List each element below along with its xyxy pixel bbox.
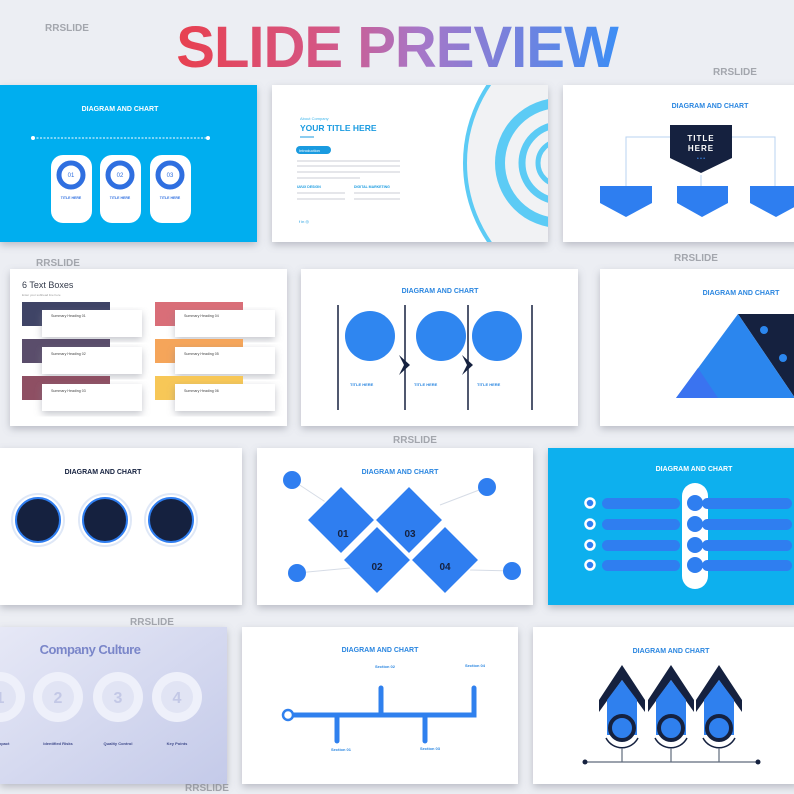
slide 2: Introduction <box>299 148 320 153</box>
slide 8: 04 <box>439 562 451 573</box>
title: SLIDE PREVIEW <box>176 15 619 80</box>
slide 1 <box>0 85 257 242</box>
slide 10 <box>0 627 227 784</box>
slide 2 <box>268 84 552 248</box>
slide 4: Summary Heading 03 <box>51 389 86 393</box>
slide 9 <box>548 448 794 605</box>
slide 2: f in ◎ <box>299 219 309 224</box>
slide 5: DIAGRAM AND CHART <box>402 288 479 295</box>
slide 6: DIAGRAM AND CHART <box>703 290 780 297</box>
slide 4: Summary Heading 06 <box>184 389 219 393</box>
slide 5: TITLE HERE <box>477 382 501 387</box>
watermarks: RRSLIDE <box>45 23 89 34</box>
slide 4: 6 Text Boxes <box>22 280 74 290</box>
slide 3: DIAGRAM AND CHART <box>672 103 749 110</box>
slide 6 <box>600 269 794 426</box>
watermarks: RRSLIDE <box>674 253 718 264</box>
slide 10: 3 <box>114 690 123 707</box>
slide 10: Quality Control <box>104 741 132 746</box>
slide 4: Summary Heading 05 <box>184 352 219 356</box>
slide 2: About Company <box>300 116 329 121</box>
slide 11: Section 01 <box>331 747 352 752</box>
slide 2: YOUR TITLE HERE <box>300 123 377 133</box>
slide 10: Company Culture <box>40 642 141 657</box>
slide 11: Section 02 <box>375 664 396 669</box>
slide 10: Key Points <box>167 741 188 746</box>
slide 1: TITLE HERE <box>160 196 181 200</box>
slide 10: 4 <box>173 690 182 707</box>
slide 5: TITLE HERE <box>350 382 374 387</box>
slide 8: DIAGRAM AND CHART <box>362 469 439 476</box>
slide 11: Section 03 <box>420 746 441 751</box>
slide 11 <box>242 627 518 784</box>
slide 3: TITLE <box>687 134 715 143</box>
slide 2: UI/UX DESIGN <box>297 185 321 189</box>
slide 5: TITLE HERE <box>414 382 438 387</box>
slide 7 <box>0 448 242 605</box>
watermarks: RRSLIDE <box>36 258 80 269</box>
slide 3 <box>563 85 794 242</box>
slide 8 <box>257 448 533 605</box>
slide 10: 2 <box>54 690 63 707</box>
slide 8: 01 <box>337 529 349 540</box>
slide 5 <box>301 269 578 426</box>
slide 3: HERE <box>688 144 714 153</box>
watermarks: RRSLIDE <box>713 67 757 78</box>
slide 9: DIAGRAM AND CHART <box>656 466 733 473</box>
slide 3: • • • <box>697 156 705 162</box>
slide 8: 02 <box>371 562 383 573</box>
slide 1: DIAGRAM AND CHART <box>82 106 159 113</box>
slide 4 <box>10 269 287 426</box>
slide 4: Summary Heading 01 <box>51 314 86 318</box>
watermarks: RRSLIDE <box>185 783 229 794</box>
watermarks: RRSLIDE <box>393 435 437 446</box>
slide 8: 03 <box>404 529 416 540</box>
slide 12 <box>533 627 794 784</box>
slide 2: DIGITAL MARKETING <box>354 185 390 189</box>
slide 12: DIAGRAM AND CHART <box>633 648 710 655</box>
slide 1: TITLE HERE <box>110 196 131 200</box>
slide 11: Section 04 <box>465 663 486 668</box>
slide 1: 02 <box>117 173 124 179</box>
slide 1: 03 <box>167 173 174 179</box>
slide 4: Summary Heading 04 <box>184 314 219 318</box>
slide 4: Summary Heading 02 <box>51 352 86 356</box>
slide 1: 01 <box>68 173 75 179</box>
watermarks: RRSLIDE <box>130 617 174 628</box>
slide 11: DIAGRAM AND CHART <box>342 647 419 654</box>
slide 7: DIAGRAM AND CHART <box>65 469 142 476</box>
slide 4: Enter your subhead line here <box>22 293 61 297</box>
slide 1: TITLE HERE <box>61 196 82 200</box>
slide 10: Identified Risks <box>43 741 74 746</box>
